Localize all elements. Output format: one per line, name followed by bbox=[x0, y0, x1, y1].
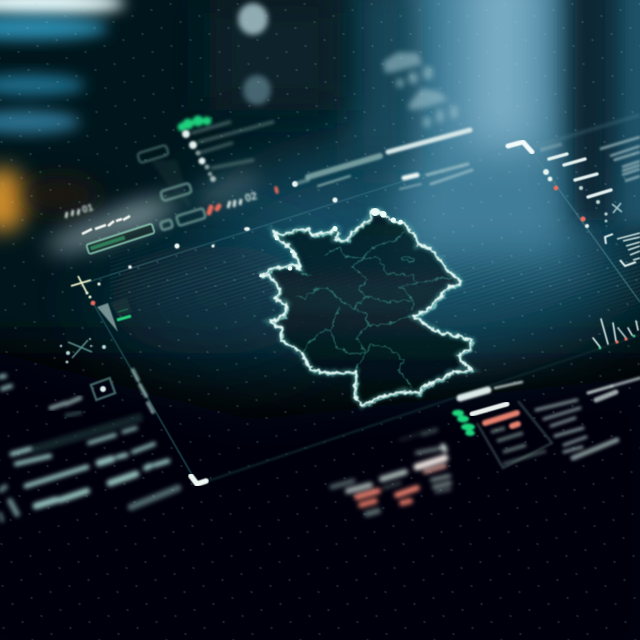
map of Germany bbox=[259, 208, 474, 408]
green indicators bbox=[178, 116, 212, 132]
outline pills bbox=[137, 145, 206, 230]
label 01: 01 bbox=[81, 202, 95, 216]
crosshair bbox=[71, 276, 101, 305]
bottom-left corner bracket bbox=[191, 476, 206, 484]
mini chart with green label bbox=[97, 298, 132, 332]
right text bars bbox=[549, 154, 611, 197]
country outline bbox=[260, 212, 474, 408]
icon: small cross bbox=[612, 203, 622, 213]
northern islands bbox=[259, 208, 403, 277]
corner bracket bbox=[508, 142, 532, 152]
long header bar bbox=[388, 130, 470, 152]
right text rows bbox=[540, 137, 640, 181]
sparse dots bbox=[60, 338, 106, 363]
map land fill bbox=[260, 212, 472, 406]
status dots bbox=[182, 130, 216, 182]
icon: target square bbox=[91, 378, 115, 400]
label 02: 02 bbox=[244, 190, 259, 205]
top-right data blocks bbox=[383, 52, 640, 349]
glyph block bbox=[51, 398, 80, 408]
bottom-center data panel bbox=[332, 378, 640, 514]
right edge markers bbox=[543, 169, 608, 228]
scan lines band bbox=[110, 264, 640, 296]
top-left status panel bbox=[66, 116, 380, 269]
lower left cards bbox=[332, 430, 450, 514]
small bars bbox=[400, 164, 472, 189]
right text rows bbox=[536, 400, 617, 458]
top white labels bbox=[460, 378, 640, 400]
hatched column bbox=[150, 160, 192, 210]
table rows bbox=[0, 376, 178, 520]
label 02 bbox=[228, 190, 259, 208]
frame dots bbox=[128, 181, 338, 269]
bracket with text bbox=[605, 233, 640, 266]
card outline bbox=[477, 401, 552, 468]
label 01 bbox=[66, 202, 95, 218]
bottom-left data panel bbox=[0, 276, 206, 520]
far blurred charts bbox=[383, 52, 458, 128]
state borders bbox=[295, 232, 453, 387]
status text lines bbox=[192, 122, 273, 168]
panel frame bbox=[85, 115, 640, 482]
progress bar bbox=[86, 223, 155, 254]
outline glow bbox=[260, 212, 472, 406]
card red bars bbox=[485, 413, 518, 426]
column text along frame bbox=[133, 370, 153, 412]
glyph row bbox=[82, 216, 130, 234]
card rows bbox=[491, 428, 546, 464]
table header band bbox=[32, 417, 142, 450]
bar chart bbox=[593, 319, 638, 349]
blurred header text bbox=[298, 156, 380, 186]
red markers bbox=[209, 188, 277, 213]
green status indicators bbox=[452, 410, 475, 436]
card white bar bbox=[472, 404, 507, 414]
icon: cross mark bbox=[68, 340, 92, 358]
